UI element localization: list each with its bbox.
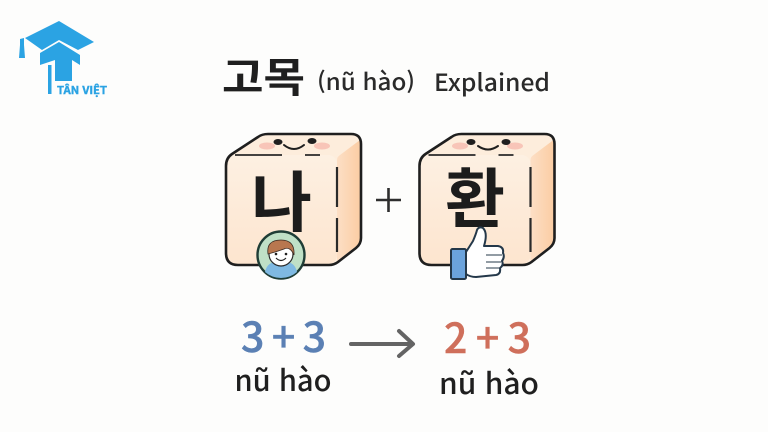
title: Korean word: 고목 xyxy=(222,44,305,104)
block: 환 with thumbs-up icon xyxy=(420,134,554,279)
hangul: 나: 나 xyxy=(251,150,312,246)
hangul: 환: 환 xyxy=(445,147,505,241)
block: 나 with person icon xyxy=(226,134,361,278)
formula: 2 + 3: 2+3 xyxy=(444,305,531,365)
label: nũ hào left: nũ hào xyxy=(234,358,332,400)
plus sign xyxy=(376,188,401,212)
cube face xyxy=(452,139,523,150)
title: Explained: Explained xyxy=(434,63,550,98)
title xyxy=(222,44,550,104)
icon: person xyxy=(258,232,304,278)
logo: Tân Việt graduation cap: TÂN VIỆT xyxy=(57,83,107,98)
arrow xyxy=(351,331,413,356)
logo: Tân Việt graduation cap xyxy=(19,21,107,98)
cube face xyxy=(259,138,330,150)
icon: thumbs up xyxy=(451,227,504,279)
label: nũ hào right: nũ hào xyxy=(439,361,539,403)
title: romanization: (nũ hào) xyxy=(317,63,415,97)
formula: 3 + 3: 3+3 xyxy=(241,304,326,364)
